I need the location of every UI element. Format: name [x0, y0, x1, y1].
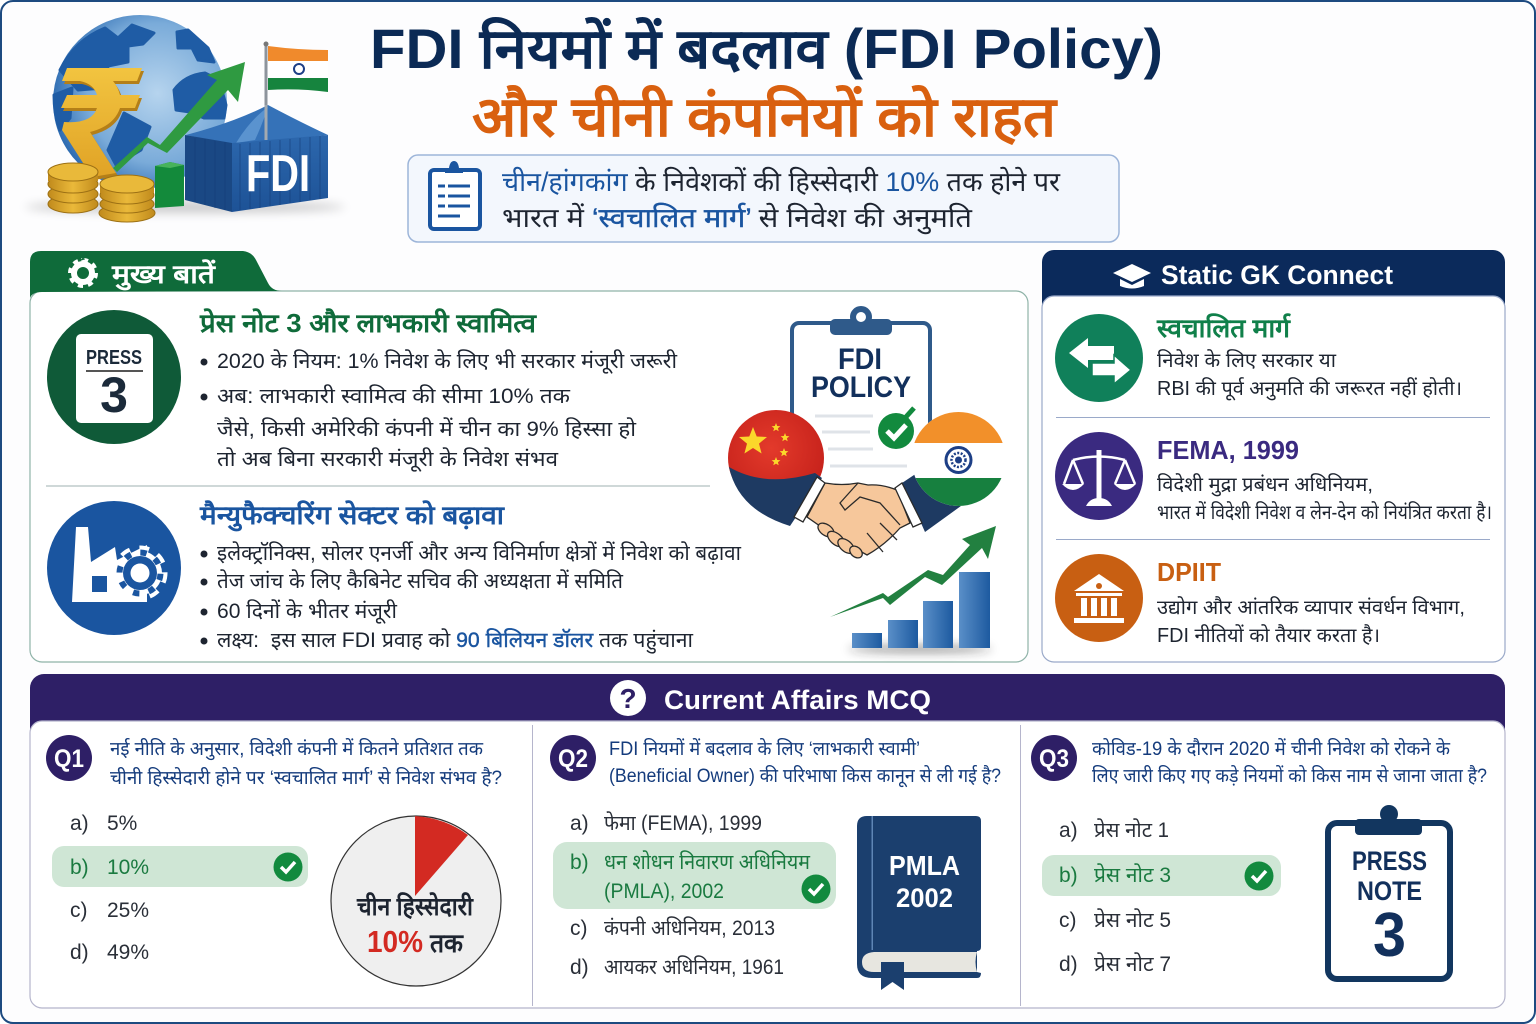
icon: globe	[53, 15, 227, 189]
chart: 10 percent pie: 10%	[367, 924, 423, 959]
item: DPIIT: उद्योग और आंतरिक व्यापार संवर्धन विभाग,	[1157, 596, 1465, 619]
item: FEMA 1999: भारत में विदेशी निवेश व लेन-देन को नियंत्रित करता है।	[1157, 501, 1492, 524]
section: press note 3 text: 2020 के नियम: 1% निवेश के लिए भी सरकार मंजूरी जरूरी	[217, 349, 678, 374]
question 2: d)	[570, 956, 589, 979]
panel: key points	[30, 251, 1028, 662]
section: manufacturing text: 60 दिनों के भीतर मंजूरी	[217, 599, 398, 624]
section: press note 3 text: जैसे, किसी अमेरिकी कंपनी में चीन का 9% हिस्सा हो	[217, 417, 637, 441]
flag: india	[902, 412, 1003, 532]
icon: press note 3 clipboard: PRESS	[1352, 846, 1427, 876]
icon: PMLA 2002 book	[857, 816, 981, 990]
question 3: कोविड-19 के दौरान 2020 में चीनी निवेश को रोकने के	[1092, 737, 1450, 760]
illustration: handshake with flags	[728, 405, 1010, 560]
question 3: प्रेस नोट 7	[1094, 952, 1171, 976]
chart: rising bars with arrow	[830, 526, 996, 652]
item: FEMA 1999	[1055, 432, 1492, 524]
icon: coin stacks	[48, 163, 155, 222]
tab: key points heading: मुख्य बातें	[111, 259, 216, 291]
question 3: प्रेस नोट 1	[1094, 818, 1169, 842]
question 3: लिए जारी किए गए कड़े नियमों को किस नाम से जाना जाता है?	[1092, 764, 1487, 787]
chart: 10 percent pie: तक	[429, 928, 464, 958]
callout text: भारत में ‘स्वचालित मार्ग’ से निवेश की अनुमति	[502, 202, 973, 235]
section: manufacturing text: लक्ष्य: इस साल FDI प्रवाह को 90 बिलियन डॉलर तक पहुंचाना	[217, 628, 694, 654]
heading: current affairs MCQ	[610, 680, 931, 716]
section: press note 3 text	[199, 308, 678, 472]
section: press note 3 text: अब: लाभकारी स्वामित्व की सीमा 10% तक	[217, 384, 571, 408]
chart: 10 percent pie: चीन हिस्सेदारी	[356, 892, 474, 921]
item: automatic route: स्वचालित मार्ग	[1156, 313, 1291, 343]
title	[370, 16, 1163, 148]
question 1: d)	[70, 941, 89, 964]
question 3: a)	[1059, 819, 1078, 842]
icon: press note 3 clipboard	[1328, 805, 1450, 979]
question 1	[46, 735, 502, 986]
icon: PMLA 2002 book: 2002	[896, 883, 953, 913]
question 1: Q1	[54, 745, 84, 773]
question 2: c)	[570, 917, 588, 940]
tab: key points heading	[30, 251, 282, 298]
icon: rupee symbol	[61, 68, 144, 180]
icon: press note 3 clipboard: 3	[1373, 901, 1406, 970]
item: DPIIT: DPIIT	[1157, 557, 1221, 587]
question 1: a)	[70, 812, 89, 835]
icon: green bar	[155, 162, 184, 208]
question 1: b)	[70, 856, 89, 879]
title: और चीनी कंपनियों को राहत	[472, 84, 1058, 148]
icon: press note 3 clipboard: NOTE	[1357, 876, 1422, 906]
icon: handshake	[794, 477, 922, 560]
question 2: a)	[570, 812, 589, 835]
item: automatic route	[1055, 313, 1462, 402]
question 3: b)	[1059, 864, 1078, 887]
panel: current affairs MCQ	[30, 674, 1505, 1008]
illustration: FDI policy clipboard	[792, 309, 930, 493]
question 1: 10%	[107, 856, 149, 879]
question 2: कंपनी अधिनियम, 2013	[604, 916, 775, 940]
question 2: (PMLA), 2002	[604, 880, 724, 903]
item: FEMA 1999: FEMA, 1999	[1157, 435, 1299, 465]
heading: current affairs MCQ: ?	[619, 683, 637, 714]
heading: static gk connect: Static GK Connect	[1161, 260, 1393, 290]
question 1: चीनी हिस्सेदारी होने पर ‘स्वचालित मार्ग’ से निवेश संभव है?	[110, 766, 502, 789]
illustration: globe, rupee, coins, FDI container	[25, 15, 345, 222]
item: FEMA 1999: विदेशी मुद्रा प्रबंधन अधिनियम,	[1157, 473, 1373, 497]
question 1: 5%	[107, 812, 137, 835]
question 2: Q2	[558, 745, 588, 773]
section: press note 3 text: तो अब बिना सरकारी मंजूरी के निवेश संभव	[217, 447, 558, 472]
title: FDI नियमों में बदलाव (FDI Policy)	[370, 16, 1163, 80]
question 3: प्रेस नोट 3	[1094, 863, 1171, 887]
icon: press note 3	[47, 310, 181, 444]
question 2: धन शोधन निवारण अधिनियम	[604, 850, 810, 874]
item: DPIIT	[1055, 554, 1465, 647]
illustration: FDI policy clipboard: FDI	[838, 343, 882, 376]
section: manufacturing text: इलेक्ट्रॉनिक्स, सोलर एनर्जी और अन्य विनिर्माण क्षेत्रों में निवेश को बढ़ावा	[217, 541, 742, 565]
heading: current affairs MCQ: Current Affairs MCQ	[664, 685, 931, 715]
icon: FDI container	[185, 105, 328, 212]
question 3: Q3	[1039, 745, 1069, 773]
section: manufacturing text: तेज जांच के लिए कैबिनेट सचिव की अध्यक्षता में समिति	[217, 569, 624, 593]
question 2: (Beneficial Owner) की परिभाषा किस कानून से ली गई है?	[609, 764, 1001, 788]
icon: green rising arrow	[113, 62, 245, 172]
question 1: 25%	[107, 899, 149, 922]
icon: press note 3: 3	[100, 367, 128, 423]
question 3: d)	[1059, 953, 1078, 976]
question 3	[1031, 735, 1487, 979]
question 2: FDI नियमों में बदलाव के लिए ‘लाभकारी स्वामी’	[609, 737, 920, 760]
question 2: आयकर अधिनियम, 1961	[604, 955, 784, 979]
question 2: फेमा (FEMA), 1999	[604, 811, 762, 835]
section: press note 3 text: प्रेस नोट 3 और लाभकारी स्वामित्व	[199, 308, 538, 338]
question 1: 49%	[107, 941, 149, 964]
panel: static gk connect	[1042, 250, 1505, 662]
icon: PMLA 2002 book: PMLA	[889, 850, 960, 881]
section: manufacturing text: मैन्युफैक्चरिंग सेक्टर को बढ़ावा	[199, 500, 505, 532]
callout text	[502, 166, 1061, 235]
callout text: चीन/हांगकांग के निवेशकों की हिस्सेदारी 10% तक होने पर	[502, 166, 1061, 197]
item: automatic route: निवेश के लिए सरकार या	[1157, 349, 1337, 372]
icon: FDI container: FDI	[246, 145, 310, 203]
item: automatic route: RBI की पूर्व अनुमति की जरूरत नहीं होती।	[1157, 377, 1462, 401]
icon: factory gear	[47, 501, 181, 635]
question 1: c)	[70, 899, 88, 922]
icon: flag	[264, 42, 328, 139]
question 1: नई नीति के अनुसार, विदेशी कंपनी में कितने प्रतिशत तक	[110, 737, 483, 761]
flag: china	[728, 410, 824, 526]
section: manufacturing text	[199, 500, 742, 654]
question 2: b)	[570, 851, 589, 874]
item: DPIIT: FDI नीतियों को तैयार करता है।	[1157, 624, 1380, 647]
question 2	[550, 735, 1001, 990]
illustration: FDI policy clipboard: POLICY	[811, 371, 911, 404]
icon: press note 3: PRESS	[86, 347, 142, 369]
callout: key rule	[408, 155, 1119, 242]
icon: checklist clipboard	[430, 161, 480, 229]
chart: 10 percent pie	[331, 816, 501, 986]
question 3: प्रेस नोट 5	[1094, 908, 1171, 932]
question 3: c)	[1059, 909, 1076, 932]
